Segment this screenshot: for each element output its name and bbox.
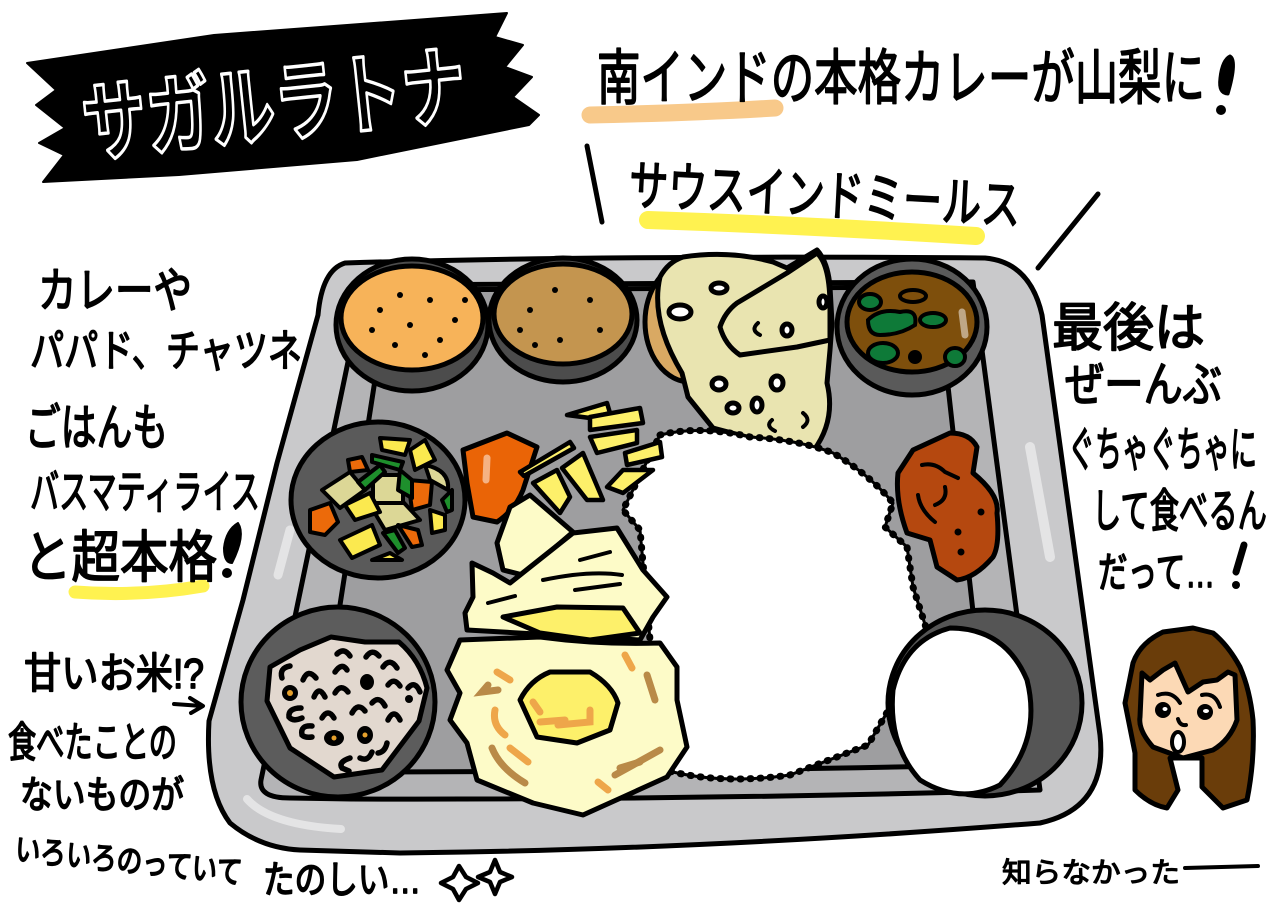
left note: curry, papad, chutney: パパド、チャツネ	[30, 327, 302, 376]
icon: sparkles	[441, 860, 512, 900]
tray	[208, 257, 1101, 853]
dosa fold	[465, 495, 667, 640]
right note: mix everything: 最後は	[1052, 300, 1205, 358]
yogurt bowl	[888, 610, 1082, 796]
left note: basmati rice: と超本格	[23, 526, 217, 589]
left note: curry, papad, chutney: カレーや	[38, 265, 192, 318]
subheading: South India meals: サウスインドミールス	[627, 156, 1022, 236]
left note: curry, papad, chutney	[30, 265, 302, 376]
left note: sweet rice: たのしい…	[263, 860, 421, 902]
yellow sliced vegetables	[520, 403, 662, 513]
left note: sweet rice: 甘いお米!?	[24, 650, 204, 697]
left note: basmati rice: ごはんも	[25, 400, 168, 456]
left note: sweet rice: ないものが	[20, 775, 184, 817]
rice pudding bowl	[241, 607, 435, 797]
bowl: orange curry	[336, 259, 488, 391]
title banner: サガルラトナ	[78, 36, 471, 175]
left note: sweet rice: 食べたことの	[8, 719, 177, 766]
bowl: green curry	[837, 259, 987, 395]
right note: mix everything	[1052, 300, 1267, 596]
left note: sweet rice: いろいろのっていて	[13, 831, 244, 891]
right note: mix everything: だって…	[1098, 549, 1215, 596]
fried egg	[447, 637, 687, 815]
rice	[623, 430, 930, 779]
right note: mix everything: ぜーんぶ	[1065, 359, 1222, 412]
orange pickle	[463, 433, 537, 522]
left note: sweet rice	[8, 650, 421, 902]
subheading: South India meals	[587, 146, 1098, 268]
red pickle	[897, 433, 998, 580]
character: girl	[1125, 628, 1253, 808]
left note: basmati rice	[23, 400, 260, 594]
vegetable bowl	[291, 422, 465, 578]
caption: didn't know: 知らなかった	[1002, 857, 1180, 888]
papad and chutney bowl	[645, 250, 832, 450]
bowl: brown curry	[489, 258, 637, 382]
left note: basmati rice: バスマティライス	[30, 466, 260, 518]
